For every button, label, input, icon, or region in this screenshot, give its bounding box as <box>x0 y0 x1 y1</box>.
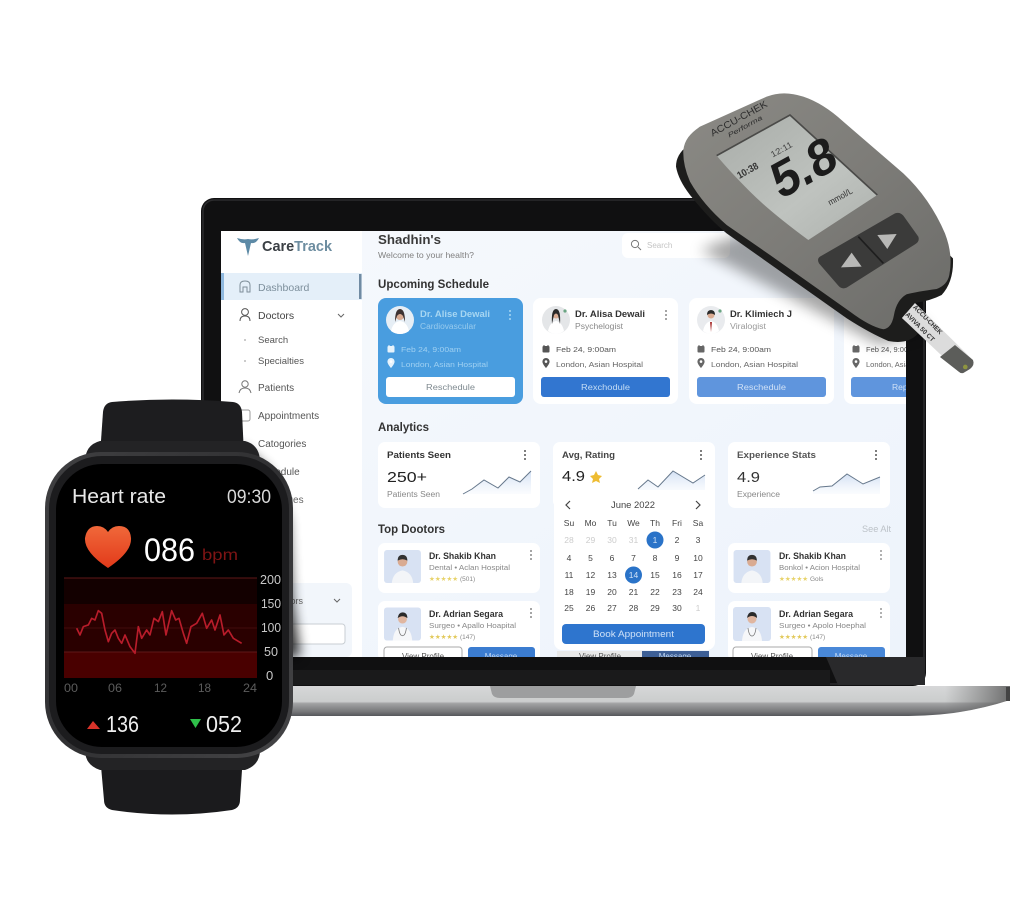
meter top shell <box>683 93 951 329</box>
stat card: patients seen <box>378 442 540 508</box>
date grid: 28 <box>564 535 574 545</box>
laptop <box>201 198 1010 716</box>
date grid: 28 <box>629 603 638 613</box>
doctor card: Adrian Segara left: ★★★★★ (147) <box>429 633 475 641</box>
stat card: experience stats: 4.9 <box>737 469 760 486</box>
date grid: 3 <box>696 535 701 545</box>
stat card: patients seen: Patients Seen <box>387 450 451 461</box>
nav: doctors: Specialties <box>258 356 304 367</box>
nav: doctors <box>240 309 344 367</box>
doctor card: Shakib Khan right: Dr. Shakib Khan <box>779 551 846 562</box>
sidebar profile card <box>240 583 352 657</box>
nav: lower items <box>239 410 319 506</box>
date grid: 5 <box>588 553 593 563</box>
bpm value: 086 <box>144 532 195 568</box>
strap lugs <box>85 441 260 770</box>
heading: analytics: Analytics <box>378 422 429 434</box>
schedule card 2: Dr. Alisa Dewali <box>575 309 645 320</box>
calendar popup: June 2022 <box>611 500 655 511</box>
stat card: experience stats <box>728 442 890 508</box>
weekday header: Su <box>564 518 574 528</box>
heart rate chart: 50 <box>264 644 278 659</box>
heart rate chart: 00 <box>64 681 78 695</box>
laptop base <box>280 686 1010 716</box>
test strip: ACCU-CHEK <box>911 304 943 336</box>
bottom strap <box>100 755 243 814</box>
doctor card: Adrian Segara right <box>728 601 890 657</box>
date grid: 13 <box>607 570 617 580</box>
date grid: 11 <box>565 570 574 580</box>
meter buttons <box>818 213 919 288</box>
schedule card 4 clipped: Rep <box>892 382 908 392</box>
date grid: 4 <box>567 553 572 563</box>
nav: patients: Patients <box>258 383 294 394</box>
greeting: Shadhin's <box>378 232 441 247</box>
screen title: Heart rate <box>72 486 166 508</box>
see all link: See Alt <box>862 524 891 534</box>
date grid: 26 <box>586 603 595 613</box>
heart icon <box>85 526 131 568</box>
nav: patients <box>239 381 294 394</box>
min reading: 052 <box>206 711 242 737</box>
weekday header: Tu <box>607 518 617 528</box>
doctor card: Adrian Segara left: View Profile <box>402 652 445 661</box>
schedule card 4 clipped: London, Asian <box>866 360 914 369</box>
max reading <box>87 711 139 737</box>
nav: dashboard active <box>221 273 362 300</box>
doctor card: Adrian Segara right: Message <box>835 652 868 661</box>
schedule card 1 highlighted: Cardiovascular <box>420 322 476 331</box>
nav: lower items: Catogories <box>258 439 306 450</box>
doctor card: Adrian Segara right: Surgeo • Apolo Hoephal <box>779 621 866 630</box>
schedule card 2: Psychelogist <box>575 322 624 331</box>
schedule card 1 highlighted: Reschedule <box>426 382 475 392</box>
date grid: 21 <box>629 587 638 597</box>
doctor card: Shakib Khan left: Dr. Shakib Khan <box>429 551 496 562</box>
hidden card buttons behind calendar: View Profile <box>579 652 622 661</box>
heart rate chart <box>64 572 281 695</box>
logo: CareTrack <box>262 238 333 255</box>
watch case <box>45 452 293 758</box>
schedule card 2 <box>533 298 678 404</box>
schedule card 3: Reschedule <box>737 382 786 392</box>
nav: lower items: Schedule <box>258 467 300 478</box>
date grid: 12 <box>586 570 595 580</box>
doctor card: Adrian Segara left <box>378 601 540 657</box>
brand label: ACCU-CHEK <box>709 99 770 139</box>
laptop lid <box>201 198 926 686</box>
schedule card 3: Dr. Klimiech J <box>730 309 792 320</box>
doctor card: Shakib Khan left: ★★★★★ (501) <box>429 575 475 583</box>
search box: Search <box>647 241 672 250</box>
sidebar profile card: Doctors <box>272 596 304 606</box>
heart rate chart: 0 <box>266 668 273 683</box>
heart rate chart: 100 <box>261 620 281 635</box>
schedule card 1 highlighted <box>378 298 523 404</box>
sidebar <box>221 231 362 657</box>
doctor card: Shakib Khan right <box>728 543 890 593</box>
calendar popup <box>554 490 715 650</box>
heart rate chart: 06 <box>108 681 122 695</box>
nav: lower items: Messages <box>258 495 304 506</box>
date grid: 31 <box>629 535 638 545</box>
date grid: 1 <box>653 535 658 545</box>
meter dark casing <box>676 105 953 342</box>
min reading <box>190 711 242 737</box>
schedule card 2: Feb 24, 9:00am <box>556 345 616 354</box>
heart rate chart: 200 <box>260 572 281 587</box>
stat card: experience stats: Experience Stats <box>737 450 816 461</box>
doctor card: Adrian Segara left: Dr. Adrian Segara <box>429 609 504 620</box>
bpm value <box>144 532 238 568</box>
doctor card: Shakib Khan right: ★★★★★ Gols <box>779 575 824 583</box>
doctor card: Adrian Segara right: Dr. Adrian Segara <box>779 609 854 620</box>
schedule card 1 highlighted: Feb 24, 9:00am <box>401 345 461 354</box>
date grid <box>564 532 703 613</box>
LCD display: 5.8 <box>764 125 844 210</box>
hidden card buttons behind calendar: Message <box>659 652 692 661</box>
doctor card: Adrian Segara left: Surgeo • Apallo Hoapital <box>429 621 516 630</box>
LCD display: mmol/L <box>826 186 854 207</box>
watch screen <box>56 464 282 747</box>
doctor card: Adrian Segara right: ★★★★★ (147) <box>779 633 825 641</box>
date grid: 29 <box>650 603 660 613</box>
hidden card buttons behind calendar <box>557 651 709 657</box>
heart rate chart: 12 <box>154 681 167 695</box>
smartwatch <box>45 400 293 814</box>
doctor card: Shakib Khan left: Dental • Aclan Hospital <box>429 563 510 572</box>
date grid: 29 <box>586 535 595 545</box>
heading: top doctors: Top Dootors <box>378 524 445 536</box>
LCD display: 12:11 <box>769 139 794 159</box>
date grid: 8 <box>653 553 658 563</box>
date grid: 15 <box>650 570 660 580</box>
weekday header: Th <box>650 518 660 528</box>
weekday header: We <box>627 518 640 528</box>
schedule card 2: London, Asian Hospital <box>556 360 643 369</box>
nav: doctors: Search <box>258 335 288 346</box>
stat card: avg rating: Avg, Rating <box>562 450 615 461</box>
date grid: 24 <box>693 587 703 597</box>
date grid: 9 <box>675 553 680 563</box>
brand label: Performa <box>727 115 764 139</box>
logo <box>237 238 333 256</box>
max reading: 136 <box>106 711 139 737</box>
book appointment button: Book Appointment <box>593 629 675 639</box>
test strip <box>902 303 974 373</box>
stat card: patients seen: Patients Seen <box>387 490 440 499</box>
date grid: 1 <box>696 603 701 613</box>
screen time: 09:30 <box>227 487 271 508</box>
search box <box>622 233 730 258</box>
date grid: 19 <box>586 587 595 597</box>
date grid: 7 <box>631 553 636 563</box>
schedule card 1 highlighted: Dr. Alise Dewali <box>420 309 490 320</box>
schedule card 3: London, Asian Hospital <box>711 360 798 369</box>
nav: dashboard active: Dashboard <box>258 282 310 294</box>
date grid: 10 <box>693 553 703 563</box>
test strip: AVIVA 50 CT <box>904 311 936 343</box>
date grid: 14 <box>629 570 638 580</box>
heart rate chart: 150 <box>261 596 281 611</box>
watch shadow <box>240 445 300 657</box>
schedule card 3: Feb 24, 9:00am <box>711 345 771 354</box>
doctor card: Shakib Khan left <box>378 543 540 593</box>
stat card: experience stats: Experience <box>737 490 781 499</box>
LCD display: 10:38 <box>735 161 761 182</box>
heart rate chart: 18 <box>198 681 211 695</box>
heading: upcoming schedule: Upcoming Schedule <box>378 279 489 291</box>
greeting <box>378 232 474 260</box>
schedule card 4 clipped <box>844 317 906 404</box>
weekday header: Sa <box>693 518 703 528</box>
glucose meter <box>676 93 974 373</box>
date grid: 25 <box>564 603 574 613</box>
date grid: 27 <box>607 603 617 613</box>
stat card: avg rating: 4.9 <box>562 468 585 485</box>
nav: lower items: Appointments <box>258 411 319 422</box>
stat card: patients seen: 250+ <box>387 469 427 486</box>
weekday header: Mo <box>585 518 597 528</box>
book appointment button <box>562 624 705 644</box>
greeting: Welcome to your health? <box>378 250 474 260</box>
date grid: 23 <box>672 587 682 597</box>
heart rate chart: 24 <box>243 681 257 695</box>
date grid: 22 <box>650 587 660 597</box>
bpm value: bpm <box>202 547 238 564</box>
schedule card 3 <box>689 298 834 404</box>
weekday header: Fri <box>672 518 682 528</box>
stat card: avg rating <box>553 442 715 508</box>
date grid: 2 <box>675 535 680 545</box>
doctor card: Adrian Segara right: View Profile <box>751 652 794 661</box>
meter shadow <box>700 210 930 345</box>
date grid: 17 <box>693 570 703 580</box>
schedule card 4 clipped: Feb 24, 9:00am <box>866 345 919 354</box>
date grid: 20 <box>607 587 617 597</box>
date grid: 6 <box>610 553 615 563</box>
weekday header <box>564 520 704 526</box>
doctor card: Shakib Khan right: Bonkol • Acion Hospital <box>779 563 860 572</box>
date grid: 30 <box>672 603 682 613</box>
top strap <box>100 400 244 455</box>
LCD display <box>717 115 877 240</box>
nav: doctors: Doctors <box>258 310 294 322</box>
date grid: 30 <box>607 535 617 545</box>
doctor card: Adrian Segara left: Message <box>485 652 518 661</box>
schedule card 3: Viralogist <box>730 322 767 331</box>
schedule card 2: Rexchodule <box>581 382 630 392</box>
date grid: 16 <box>672 570 682 580</box>
date grid: 18 <box>564 587 574 597</box>
schedule card 1 highlighted: London, Asian Hospital <box>401 360 488 369</box>
laptop screen <box>221 231 921 667</box>
